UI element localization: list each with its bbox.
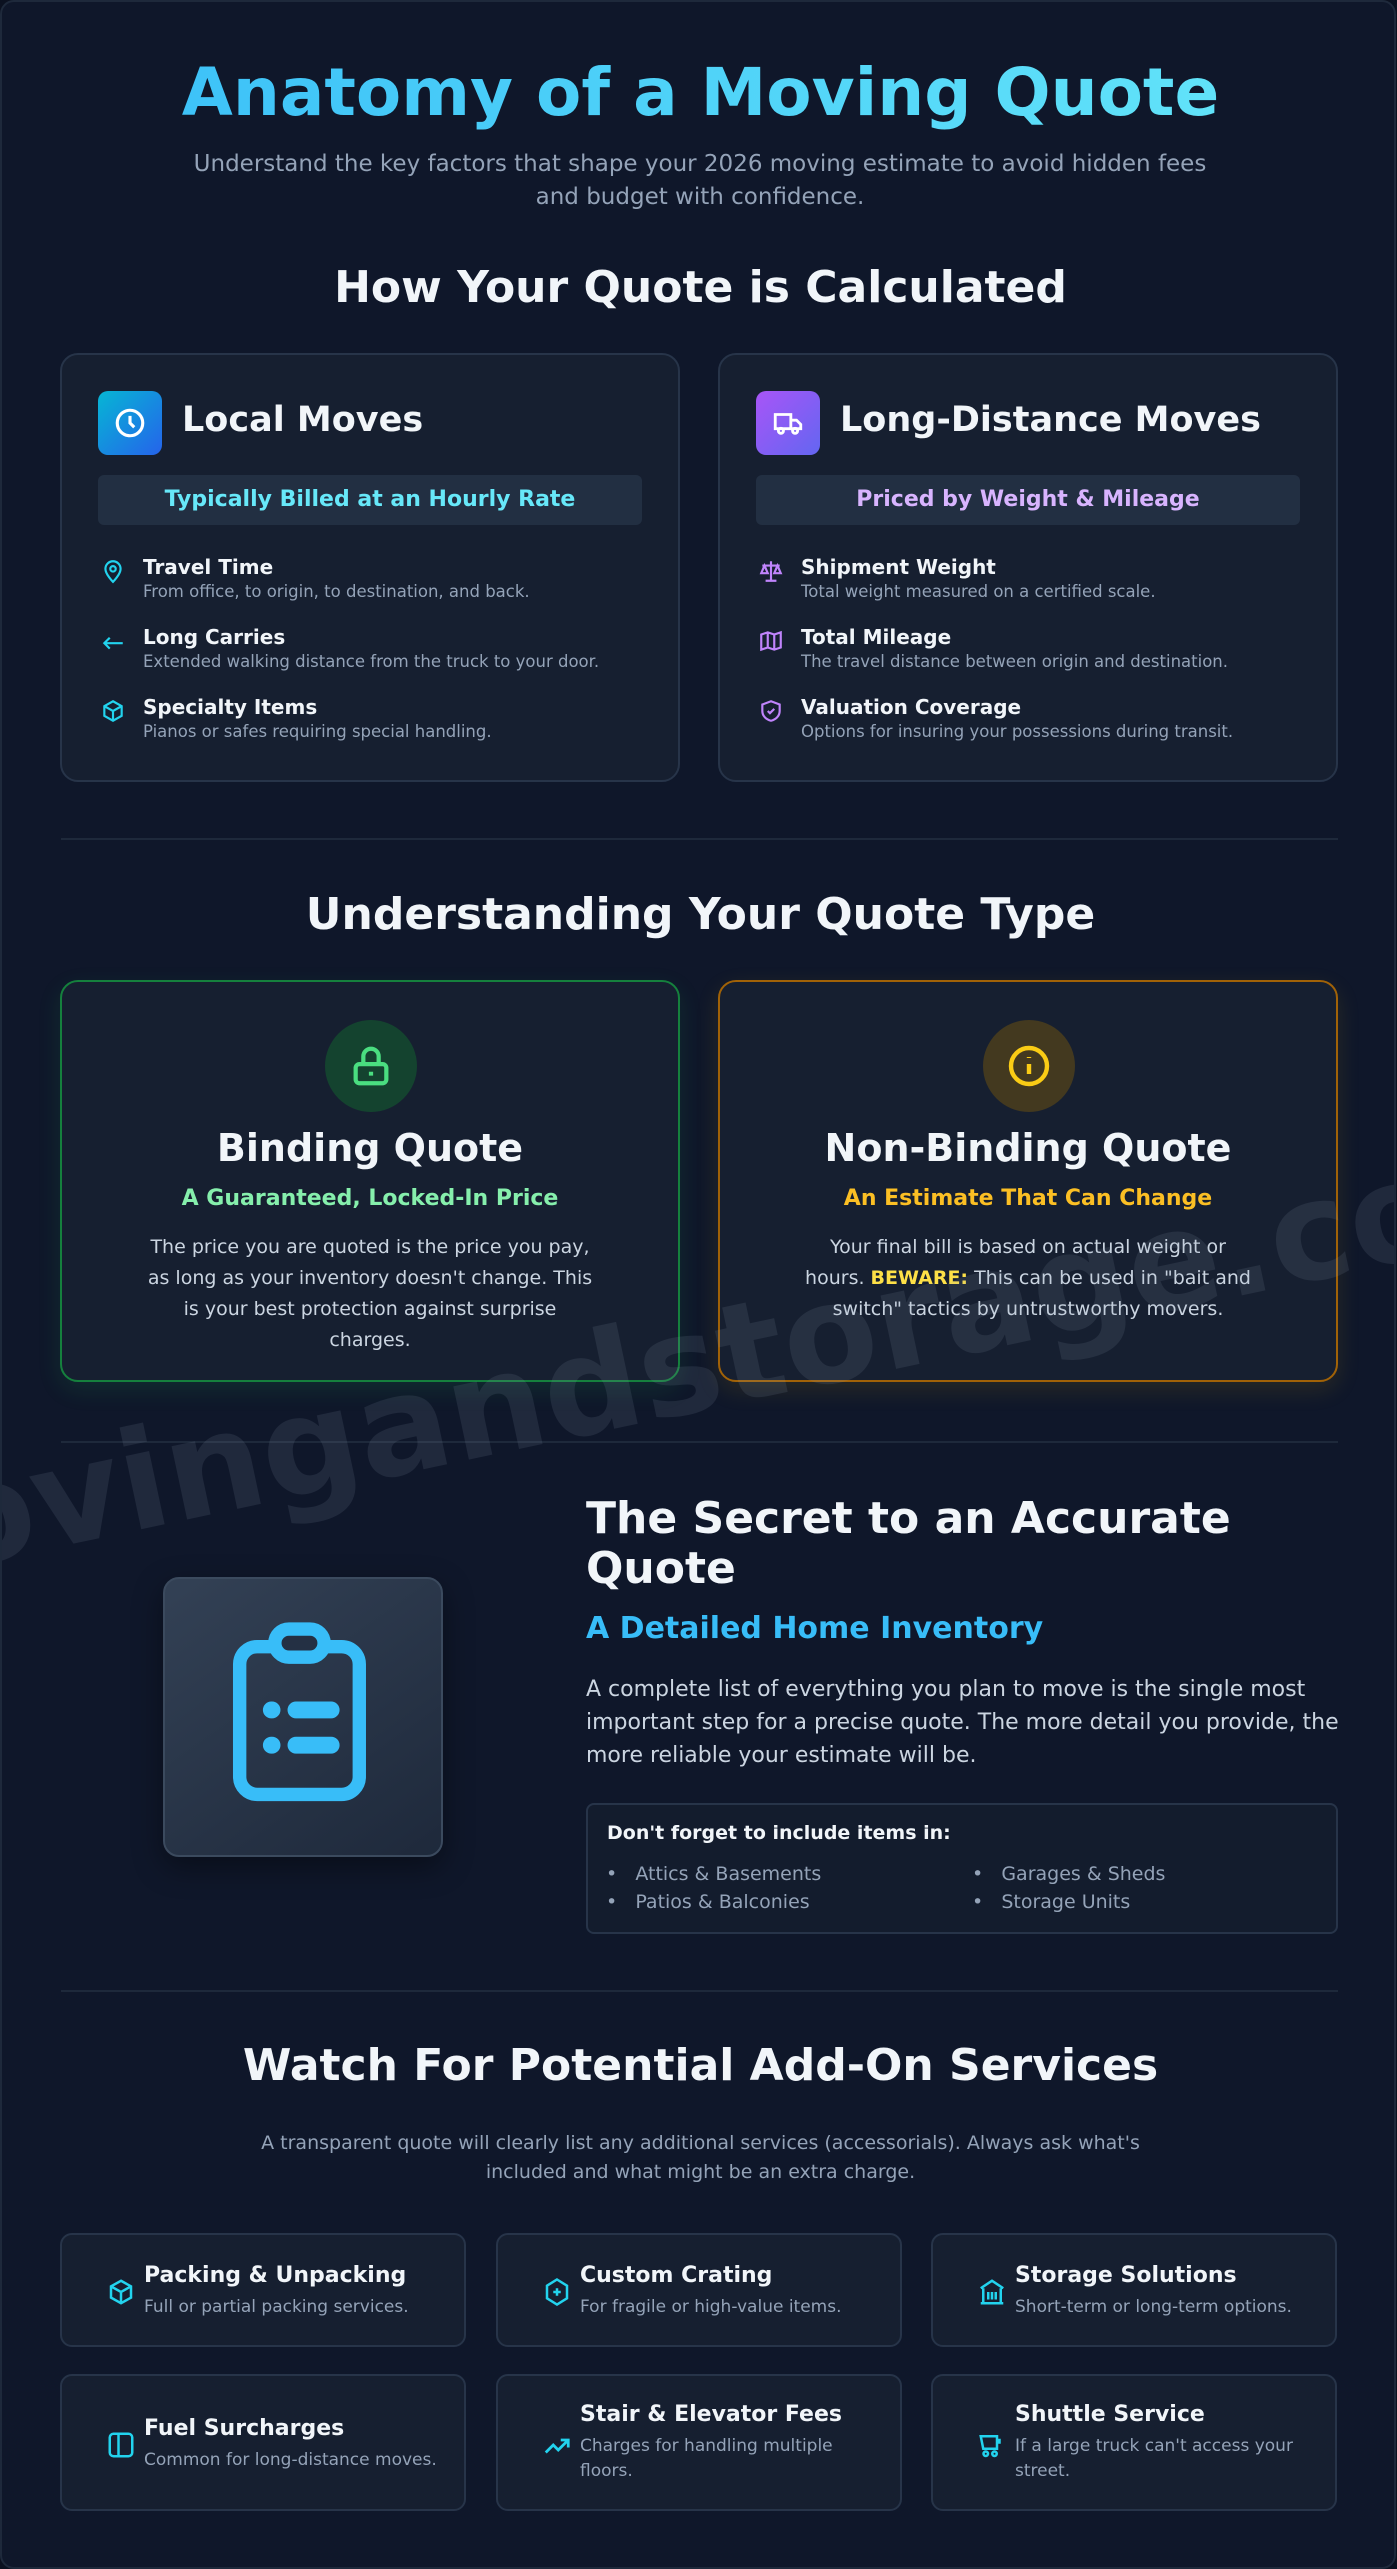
- title: Anatomy of a Moving Quote: [182, 54, 1219, 131]
- icon: clipboard: [163, 1577, 443, 1857]
- grid item: fuel: Fuel Surcharges: [144, 2416, 344, 2441]
- grid item: shuttle: If a large truck can't access your street.: [1015, 2436, 1293, 2481]
- pill: [98, 475, 642, 525]
- heading: quote type: Understanding Your Quote Type: [306, 889, 1095, 940]
- checklist box: Don't forget to include items in:: [607, 1822, 951, 1844]
- grid item: shuttle: Shuttle Service: [1015, 2402, 1205, 2427]
- grid item: stairs: Charges for handling multiple floors.: [580, 2436, 833, 2481]
- pill: Priced by Weight & Mileage: [856, 487, 1200, 512]
- panel: long-distance: Options for insuring your possessions during transit.: [801, 722, 1233, 741]
- intro text: A transparent quote will clearly list any additional services (accessorials). Always ask what's included and what might be an extra charge.: [261, 2132, 1140, 2183]
- panel: long-distance: Total Mileage: [801, 625, 951, 649]
- body: The price you are quoted is the price you pay, as long as your inventory doesn't change. This is your best protection against surprise charges.: [148, 1236, 592, 1351]
- body: Your final bill is based on actual weight or hours. BEWARE: This can be used in "bait and switch" tactics by untrustworthy movers.: [805, 1236, 1251, 1320]
- grid item: packing: Packing & Unpacking: [144, 2263, 406, 2288]
- item: weight: [760, 555, 1156, 601]
- panel: local moves: Travel Time: [143, 555, 273, 579]
- grid item: packing: [60, 2233, 466, 2347]
- item: travel time: [104, 555, 530, 601]
- panel: local moves: From office, to origin, to destination, and back.: [143, 582, 530, 601]
- heading: secret: The Secret to an Accurate Quote: [586, 1493, 1231, 1594]
- grid item: fuel: [60, 2374, 466, 2511]
- panel: long-distance: Shipment Weight: [801, 555, 996, 579]
- item: valuation: [761, 695, 1233, 741]
- icon: lock: [325, 1020, 417, 1112]
- subtitle: Understand the key factors that shape your 2026 moving estimate to avoid hidden fees and budget with confidence.: [194, 151, 1206, 210]
- item: mileage: [760, 625, 1228, 671]
- grid item: storage: Short-term or long-term options.: [1015, 2297, 1292, 2317]
- grid item: shuttle: [931, 2374, 1337, 2511]
- panel: local moves: Extended walking distance from the truck to your door.: [143, 652, 599, 671]
- grid item: crating: [496, 2233, 902, 2347]
- pill: [756, 475, 1300, 525]
- card title: Long-Distance Moves: [840, 400, 1261, 440]
- panel: local moves: [60, 353, 680, 782]
- checklist box: • Storage Units: [972, 1891, 1130, 1913]
- checklist box: • Garages & Sheds: [972, 1863, 1165, 1885]
- item: specialty: [103, 695, 492, 741]
- icon: info: [983, 1020, 1075, 1112]
- panel: non-binding: [718, 980, 1338, 1382]
- heading: how calculated: How Your Quote is Calculated: [334, 262, 1067, 313]
- checklist box: [586, 1803, 1338, 1934]
- subheading: A Detailed Home Inventory: [586, 1611, 1043, 1646]
- grid item: packing: Full or partial packing services.: [144, 2297, 409, 2317]
- title: [2, 48, 1397, 138]
- pill: Typically Billed at an Hourly Rate: [165, 487, 575, 512]
- subtitle: An Estimate That Can Change: [844, 1186, 1212, 1211]
- panel: binding quote: [60, 980, 680, 1382]
- heading: add-on: Watch For Potential Add-On Services: [243, 2040, 1158, 2091]
- subtitle: A Guaranteed, Locked-In Price: [182, 1186, 558, 1211]
- icon: truck: [756, 391, 820, 455]
- checklist box: • Attics & Basements: [606, 1863, 821, 1885]
- grid item: fuel: Common for long-distance moves.: [144, 2450, 437, 2470]
- panel: long-distance: Total weight measured on a certified scale.: [801, 582, 1156, 601]
- grid item: storage: [931, 2233, 1337, 2347]
- panel: long-distance: The travel distance between origin and destination.: [801, 652, 1228, 671]
- title: Non-Binding Quote: [825, 1126, 1231, 1170]
- panel: local moves: Specialty Items: [143, 695, 317, 719]
- grid item: crating: Custom Crating: [580, 2263, 772, 2288]
- grid item: storage: Storage Solutions: [1015, 2263, 1237, 2288]
- checklist box: • Patios & Balconies: [606, 1891, 810, 1913]
- panel: local moves: Pianos or safes requiring special handling.: [143, 722, 492, 741]
- card title: Local Moves: [182, 400, 423, 440]
- grid item: stairs: Stair & Elevator Fees: [580, 2402, 842, 2427]
- item: long carries: [102, 625, 599, 671]
- panel: long-distance: Valuation Coverage: [801, 695, 1021, 719]
- paragraph: A complete list of everything you plan to move is the single most important step for a precise quote. The more detail you provide, the more reliable your estimate will be.: [586, 1677, 1339, 1768]
- title: Binding Quote: [217, 1126, 523, 1170]
- grid item: crating: For fragile or high-value items.: [580, 2297, 842, 2317]
- grid item: stairs: [496, 2374, 902, 2511]
- panel: long-distance: [718, 353, 1338, 782]
- panel: local moves: Long Carries: [143, 625, 285, 649]
- icon: clock: [98, 391, 162, 455]
